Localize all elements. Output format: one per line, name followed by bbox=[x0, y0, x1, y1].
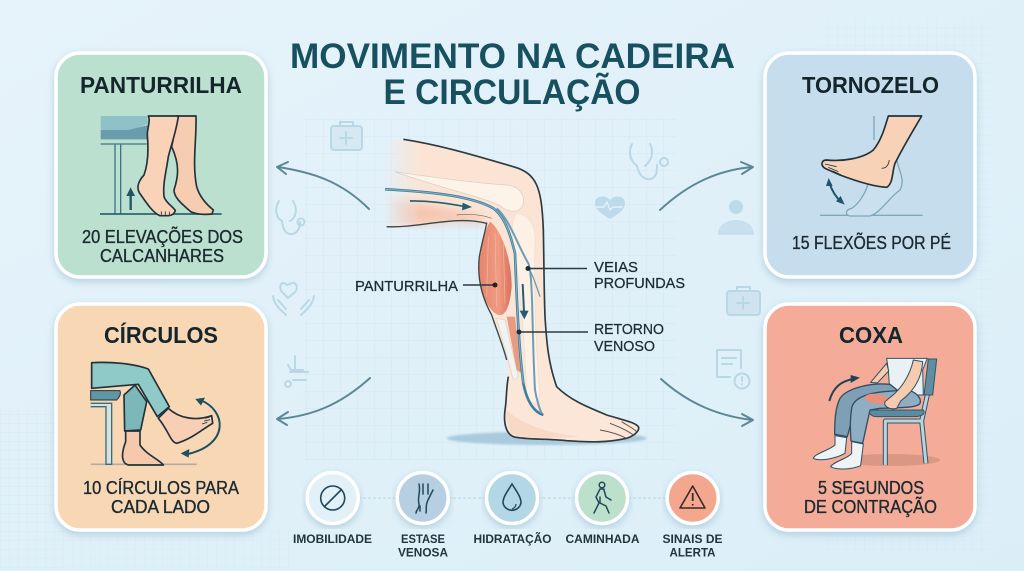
icon row item: hidratação: HIDRATAÇÃO bbox=[474, 533, 552, 546]
caption: panturrilha bbox=[82, 226, 243, 266]
calf muscle bbox=[479, 222, 512, 315]
callout: retorno venoso bbox=[516, 322, 664, 355]
bones bbox=[395, 172, 524, 211]
callout: retorno venoso: RETORNO bbox=[594, 322, 664, 338]
callout: panturrilha: PANTURRILHA bbox=[355, 279, 458, 295]
icon row item: estase venosa bbox=[397, 472, 448, 560]
caption: coxa: DE CONTRAÇÃO bbox=[804, 496, 937, 517]
illustration: ankle circles bbox=[91, 362, 220, 465]
caption: círculos bbox=[83, 478, 239, 517]
icon row item: imobilidade bbox=[293, 472, 372, 546]
callout: veias profundas: VEIAS bbox=[594, 260, 638, 276]
caption: coxa bbox=[804, 478, 937, 517]
caption: panturrilha: 20 ELEVAÇÕES DOS bbox=[82, 226, 243, 247]
leg anatomy illustration bbox=[385, 139, 647, 445]
caption: círculos: 10 CÍRCULOS PARA bbox=[83, 478, 239, 498]
icon row item: estase venosa: ESTASE bbox=[401, 534, 445, 546]
caption: tornozelo: 15 FLEXÕES POR PÉ bbox=[792, 232, 951, 253]
caption: coxa: 5 SEGUNDOS bbox=[818, 478, 924, 498]
arrow: to círculos bbox=[277, 378, 370, 425]
outline bbox=[403, 139, 639, 442]
arrow: to coxa bbox=[661, 379, 753, 426]
title: MOVIMENTO NA CADEIRA bbox=[290, 37, 735, 76]
connector between bottom icons bbox=[358, 497, 667, 499]
icon row item: hidratação bbox=[474, 472, 552, 546]
caption: panturrilha: CALCANHARES bbox=[100, 246, 224, 266]
illustration: seated thigh contraction bbox=[813, 358, 940, 469]
veins bbox=[385, 189, 543, 415]
callout: retorno venoso: VENOSO bbox=[594, 339, 655, 355]
title bbox=[290, 37, 735, 112]
panel: coxa bbox=[765, 304, 975, 530]
heading: coxa: COXA bbox=[839, 322, 903, 348]
icon row item: caminhada: CAMINHADA bbox=[566, 534, 640, 546]
icon row item: sinais de alerta: SINAIS DE bbox=[662, 534, 723, 546]
title: E CIRCULAÇÃO bbox=[384, 73, 640, 112]
caption: círculos: CADA LADO bbox=[111, 497, 210, 517]
faint background medical icons bbox=[273, 122, 760, 388]
icon row item: estase venosa: VENOSA bbox=[398, 548, 448, 560]
illustration: heel raises bbox=[100, 116, 222, 216]
illustration: ankle flexion bbox=[820, 116, 923, 216]
panel: círculos bbox=[56, 304, 266, 530]
heading: tornozelo: TORNOZELO bbox=[802, 72, 939, 98]
panel: panturrilha bbox=[56, 53, 266, 277]
arrow: to panturrilha bbox=[277, 162, 369, 209]
arrow: to tornozelo bbox=[660, 162, 753, 210]
callout: veias profundas bbox=[526, 260, 685, 292]
heading: panturrilha: PANTURRILHA bbox=[80, 72, 242, 98]
icon row item: sinais de alerta bbox=[662, 472, 723, 560]
callout: veias profundas: PROFUNDAS bbox=[594, 276, 685, 292]
flow arrows bbox=[410, 201, 464, 206]
icon row item: sinais de alerta: ALERTA bbox=[670, 548, 716, 560]
heading: círculos: CÍRCULOS bbox=[104, 321, 218, 348]
icon row item: imobilidade: IMOBILIDADE bbox=[293, 534, 372, 546]
icon row item: caminhada bbox=[566, 472, 640, 546]
panel: tornozelo bbox=[765, 53, 975, 277]
